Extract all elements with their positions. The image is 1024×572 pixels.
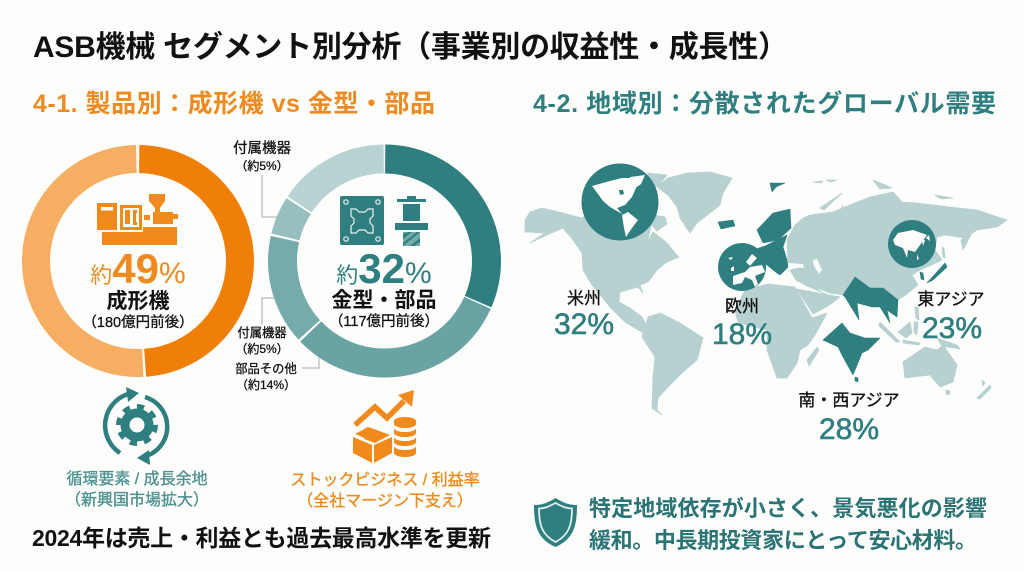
callout: other parts: 部品その他 <box>235 362 297 376</box>
label: 117 oku yen: （117億円前後） <box>329 313 439 330</box>
map inset: Americas globe <box>582 164 658 240</box>
label: Europe: 18% <box>712 318 772 351</box>
text: cycle and growth room: （新興国市場拡大） <box>65 491 209 509</box>
callout: accessories top <box>233 140 291 217</box>
text: stock business: （全社マージン下支え） <box>297 492 473 510</box>
callout: other parts: （約14%） <box>236 377 296 392</box>
text: record high: 2024年は売上・利益とも過去最高水準を更新 <box>32 525 491 551</box>
map inset: East Asia globe <box>888 220 936 268</box>
label: 180 oku yen: （180億円前後） <box>82 314 194 331</box>
icon: shield <box>534 498 577 547</box>
text: conclusion: 緩和。中長期投資家にとって安心材料。 <box>589 528 977 553</box>
icon: drill <box>395 196 428 246</box>
label: East Asia: 東アジア <box>917 290 985 309</box>
label: South and West Asia <box>798 391 900 446</box>
label: East Asia <box>917 290 985 345</box>
callout: accessories bottom: 付属機器 <box>237 326 287 340</box>
callout: accessories bottom <box>235 298 289 356</box>
heading: 4-1 product: 4-1. 製品別：成形機 vs 金型・部品 <box>33 90 435 118</box>
label: South and West Asia: 南・西アジア <box>798 391 900 410</box>
label: South and West Asia: 28% <box>819 413 879 446</box>
callout: other parts <box>235 358 319 392</box>
label: Americas <box>554 289 614 341</box>
icon: cycle gear <box>105 387 167 465</box>
panel: orange donut <box>36 159 240 363</box>
value: about 32%: 約32% <box>336 245 432 292</box>
label: Europe <box>712 297 772 351</box>
text: cycle and growth room <box>65 470 209 509</box>
callout: accessories top: （約5%） <box>235 158 289 173</box>
panel: teal donut <box>282 159 486 363</box>
label: Americas: 米州 <box>567 289 601 308</box>
world map <box>525 164 1007 415</box>
text: cycle and growth room: 循環要素 / 成長余地 <box>66 470 208 488</box>
icon: mold plate <box>340 196 384 245</box>
title: ASB機械 セグメント別分析（事業別の収益性・成長性） <box>33 31 788 64</box>
icon: injection molding machine <box>97 194 178 245</box>
text: conclusion <box>589 496 987 553</box>
callout: accessories top: 付属機器 <box>233 140 291 157</box>
heading: 4-2 region: 4-2. 地域別：分散されたグローバル需要 <box>533 89 996 118</box>
map inset: Europe globe <box>718 243 766 291</box>
icon: box coins and arrow <box>353 390 416 463</box>
donut chart: molding machine <box>36 159 240 363</box>
text: stock business: ストックビジネス / 利益率 <box>290 471 480 489</box>
value: about 49%: 約49% <box>90 245 186 292</box>
donut chart: molds and parts <box>282 159 486 363</box>
text: conclusion: 特定地域依存が小さく、景気悪化の影響 <box>589 496 987 521</box>
label: Americas: 32% <box>554 308 614 341</box>
callout: accessories bottom: （約5%） <box>235 341 289 356</box>
label: molds and parts: 金型・部品 <box>332 289 436 312</box>
map: dark highlighted regions <box>718 183 947 382</box>
label: Europe: 欧州 <box>725 297 759 316</box>
map: light continents <box>525 172 1007 415</box>
label: East Asia: 23% <box>922 312 982 345</box>
text: stock business <box>290 471 480 510</box>
label: molding machine: 成形機 <box>106 289 170 313</box>
map: white inland seas <box>788 259 822 274</box>
